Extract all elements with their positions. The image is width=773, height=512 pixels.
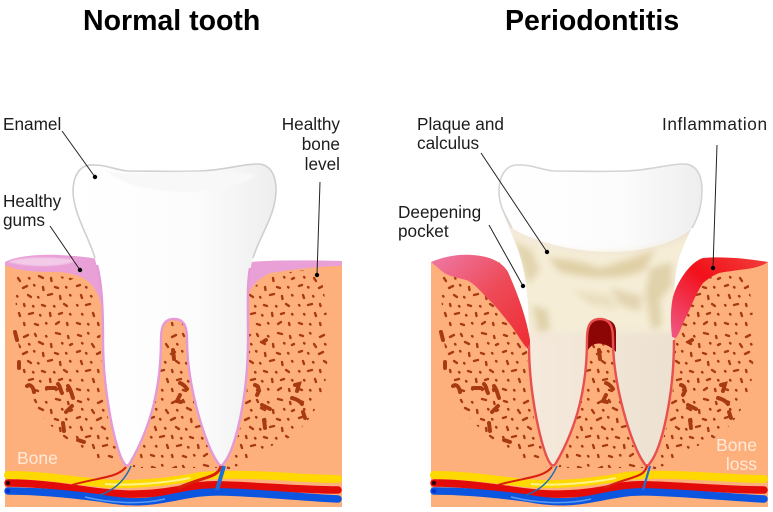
crown outline (73, 164, 276, 258)
inflamed gum left (431, 255, 530, 352)
crown (499, 164, 702, 252)
bone with vessels (431, 262, 768, 507)
plaque and calculus (513, 238, 686, 334)
vessels entering right root (178, 466, 224, 490)
gum highlight (8, 258, 76, 266)
crown shading (104, 170, 255, 192)
healthy gums right (243, 260, 342, 305)
tooth (499, 164, 702, 466)
label: Inflammation: Inflammation (662, 114, 767, 134)
pocket gap left (500, 262, 532, 352)
tooth (73, 164, 276, 466)
label: Healthy gums: Healthy (3, 191, 61, 211)
title: Normal tooth: Normal tooth (83, 5, 260, 37)
vessels entering right root (604, 466, 650, 490)
label: Plaque and calculus: calculus (417, 133, 479, 153)
label: Healthy bone level (282, 114, 340, 277)
pocket between roots (588, 319, 616, 352)
inflamed gum right (671, 257, 768, 338)
label: Healthy gums (3, 191, 82, 272)
label: Healthy bone level: level (305, 154, 340, 174)
crown outline (499, 164, 702, 228)
label: Bone loss: Bone (716, 435, 757, 455)
panel: periodontitis diagram (431, 164, 768, 507)
label: Enamel: Enamel (3, 114, 61, 134)
label: Plaque and calculus (417, 114, 549, 254)
label: Healthy bone level: Healthy (282, 114, 340, 134)
root outline (529, 319, 674, 466)
label: Deepening pocket (398, 202, 525, 288)
label: Deepening pocket: Deepening (398, 202, 481, 222)
label: Healthy bone level: bone (302, 134, 340, 154)
panel: normal tooth diagram (5, 164, 342, 507)
label: Healthy gums: gums (3, 210, 45, 230)
gap right (672, 258, 704, 305)
label: Inflammation (662, 114, 767, 270)
label: Deepening pocket: pocket (398, 221, 449, 241)
root outline (97, 265, 250, 466)
label: Plaque and calculus: Plaque and (417, 114, 504, 134)
bone with vessels (5, 262, 342, 507)
label: Bone: Bone (17, 448, 58, 468)
title: Periodontitis: Periodontitis (505, 5, 679, 37)
healthy gums left (5, 255, 108, 340)
label: Bone loss: loss (726, 454, 757, 474)
label: Enamel (3, 114, 97, 179)
